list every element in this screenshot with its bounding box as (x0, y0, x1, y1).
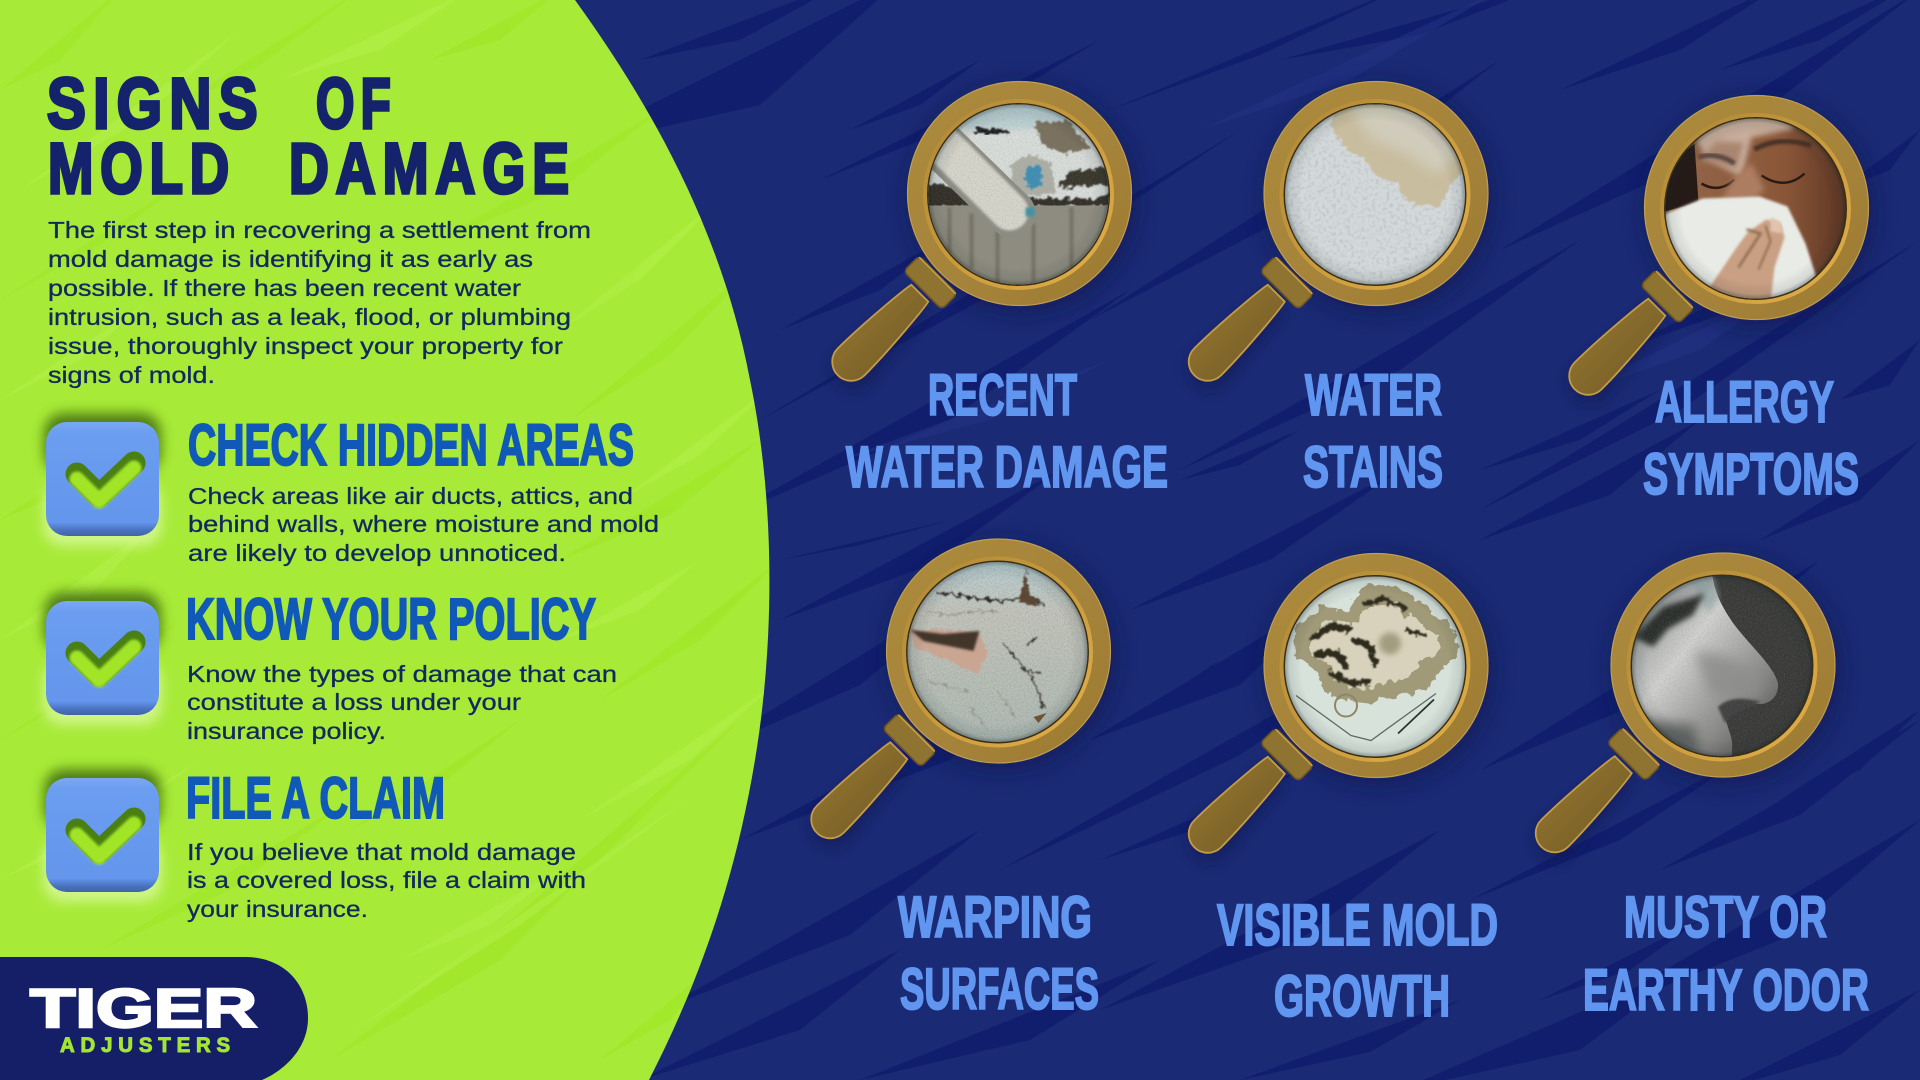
logo: Tiger Adjusters (0, 957, 308, 1080)
icon: magnifier with person sneezing (1551, 96, 1876, 413)
icon: magnifier with water stain (1171, 82, 1495, 399)
text: file a claim (187, 839, 586, 922)
label: water stains: WATER (1305, 363, 1442, 428)
icon: magnifier with peeling paint (793, 539, 1118, 857)
logo: Tiger Adjusters: TIGER (30, 977, 257, 1039)
intro paragraph: signs of mold. (48, 362, 215, 388)
text: know your policy: insurance policy. (187, 718, 386, 744)
text: check hidden areas (188, 483, 659, 566)
label: allergy symptoms (1643, 370, 1859, 507)
label: musty or earthy odor: MUSTY OR (1624, 885, 1827, 950)
text: know your policy (187, 661, 617, 744)
icon: magnifier with nose (1518, 553, 1842, 871)
sign: musty or earthy odor (1518, 553, 1869, 1023)
label: musty or earthy odor (1583, 885, 1869, 1023)
intro paragraph: mold damage is identifying it as early as (48, 246, 533, 272)
sign: water stains (1171, 82, 1495, 500)
title: OF (316, 65, 397, 144)
label: warping surfaces (898, 885, 1099, 1022)
title: MOLD (48, 130, 236, 209)
label: visible mold growth (1217, 893, 1498, 1029)
sign: recent water damage (814, 82, 1168, 500)
label: visible mold growth: GROWTH (1274, 964, 1450, 1029)
label: recent water damage: WATER DAMAGE (846, 435, 1168, 500)
label: recent water damage: RECENT (928, 363, 1077, 428)
text: file a claim: is a covered loss, file a claim with (187, 867, 586, 893)
title: SIGNS (47, 65, 265, 144)
text: check hidden areas: are likely to develop unnoticed. (188, 540, 566, 566)
text: check hidden areas: Check areas like air ducts, attics, and (188, 483, 633, 509)
text: check hidden areas: behind walls, where moisture and mold (188, 511, 659, 537)
icon: checkbox 1 (43, 413, 162, 546)
text: file a claim: your insurance. (187, 896, 368, 922)
sign: allergy symptoms (1551, 96, 1876, 507)
intro paragraph: intrusion, such as a leak, flood, or plumbing (48, 304, 571, 330)
checklist item: check hidden areas (43, 413, 659, 566)
title: DAMAGE (289, 130, 576, 209)
icon: magnifier with mold patch (1171, 554, 1495, 871)
intro paragraph (48, 217, 591, 388)
label: visible mold growth: VISIBLE MOLD (1217, 893, 1498, 958)
label: water stains: STAINS (1303, 435, 1443, 500)
title (47, 65, 576, 209)
sign: visible mold growth (1171, 554, 1498, 1029)
icon: checkbox 3 (43, 769, 162, 902)
checklist item: know your policy (43, 587, 617, 744)
text: know your policy: Know the types of damage that can (187, 661, 617, 687)
icon: magnifier with leaking pipe (814, 82, 1138, 399)
logo: Tiger Adjusters: ADJUSTERS (60, 1034, 236, 1057)
icon: checkbox 2 (43, 592, 162, 725)
intro paragraph: issue, thoroughly inspect your property for (48, 333, 563, 359)
sign: warping surfaces (793, 539, 1118, 1022)
label: recent water damage (846, 363, 1168, 500)
heading: know your policy: KNOW YOUR POLICY (186, 587, 596, 652)
text: know your policy: constitute a loss under your (187, 689, 521, 715)
heading: check hidden areas: CHECK HIDDEN AREAS (188, 413, 634, 478)
label: warping surfaces: SURFACES (900, 957, 1099, 1022)
intro paragraph: possible. If there has been recent water (48, 275, 521, 301)
intro paragraph: The first step in recovering a settlement from (48, 217, 591, 243)
checklist item: file a claim (43, 766, 586, 922)
panel: green curved intro panel (0, 0, 780, 1080)
label: water stains (1303, 363, 1443, 500)
label: warping surfaces: WARPING (898, 885, 1092, 950)
heading: file a claim: FILE A CLAIM (186, 766, 445, 831)
text: file a claim: If you believe that mold damage (187, 839, 576, 865)
